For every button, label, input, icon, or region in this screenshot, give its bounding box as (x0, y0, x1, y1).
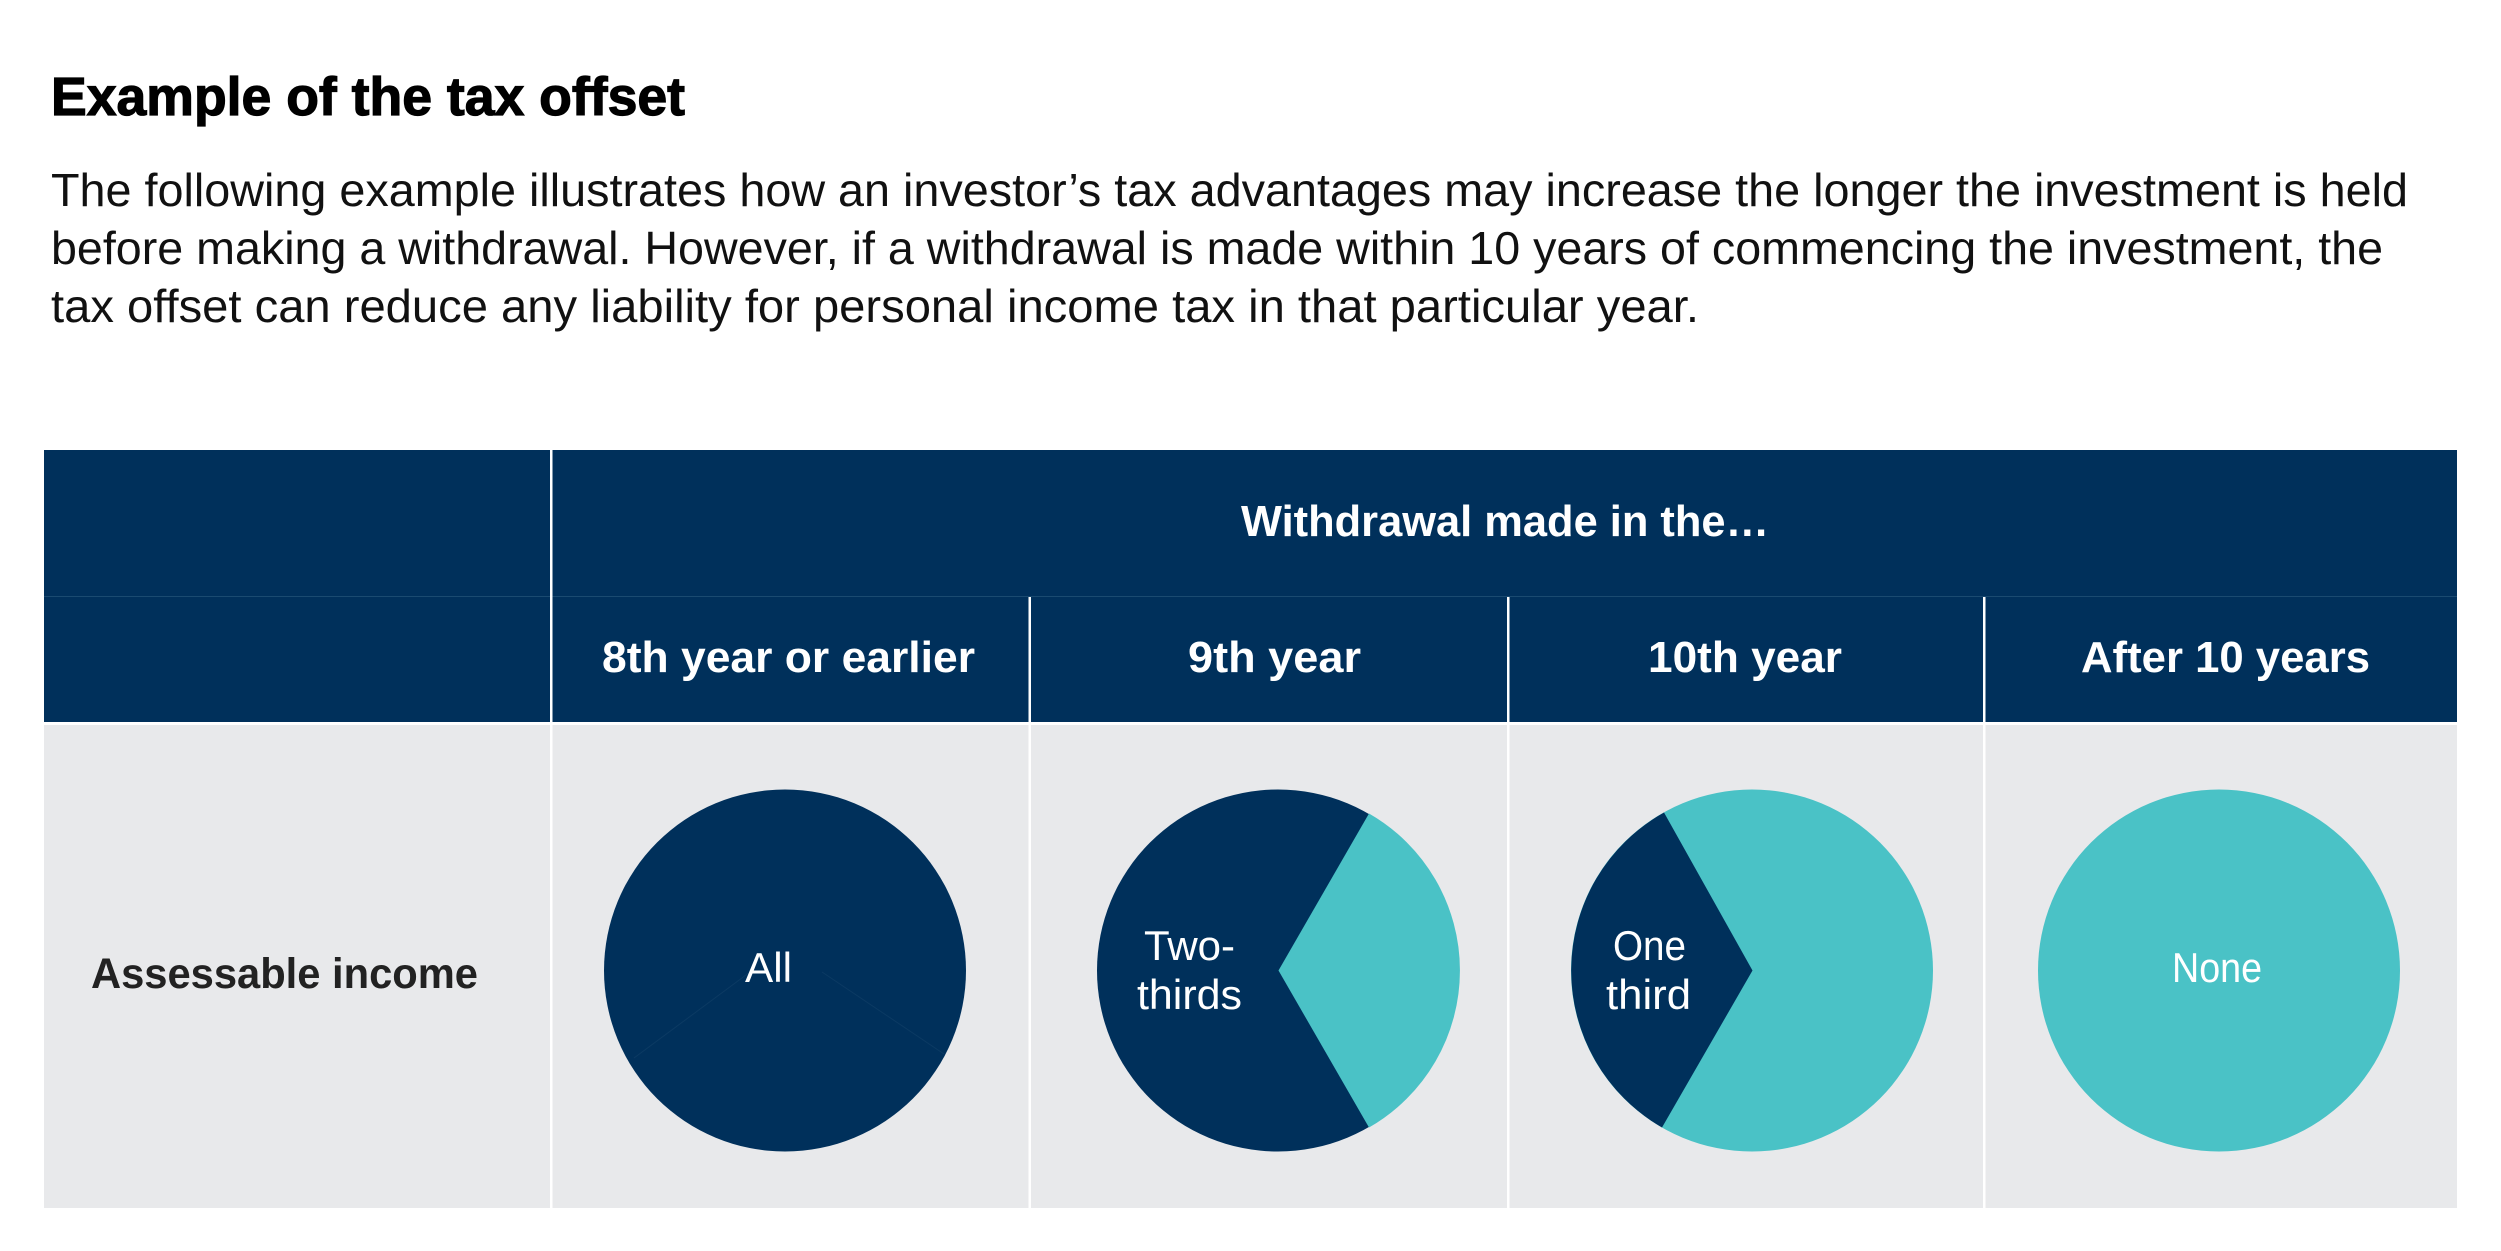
pie: none: None (2172, 944, 2262, 991)
intro text block: tax offset can reduce any liability for personal income tax in that particular year. (51, 280, 1699, 332)
column dividers (550, 450, 1986, 1208)
pie: one third: third (1606, 971, 1691, 1018)
header: 10th year: 10th year (1648, 633, 1842, 682)
pie: all (604, 790, 966, 1152)
pie: two-thirds: thirds (1137, 971, 1242, 1018)
header: 8th year or earlier: 8th year or earlier (602, 633, 975, 682)
table body band (44, 725, 2457, 1208)
header: withdrawal made in the: Withdrawal made in the… (1241, 497, 1769, 546)
title: Example of the tax offset (51, 67, 685, 127)
intro text block: before making a withdrawal. However, if a withdrawal is made within 10 years of commencing the investment, the (51, 222, 2383, 274)
pie: one third: One (1613, 922, 1686, 969)
pie: two-thirds: Two- (1144, 922, 1235, 969)
pie: all: All (745, 944, 792, 991)
row label: assessable income: Assessable income (91, 950, 478, 998)
table header band (44, 450, 2457, 722)
header: 9th year: 9th year (1188, 633, 1361, 682)
header: after 10 years: After 10 years (2081, 633, 2370, 682)
intro text block (51, 164, 2408, 332)
table (44, 450, 2457, 1208)
pie: none (2038, 790, 2400, 1152)
pie: two-thirds (1097, 790, 1460, 1152)
pie: one third (1571, 790, 1933, 1152)
intro text block: The following example illustrates how an investor’s tax advantages may increase the longer the investment is held (51, 164, 2408, 216)
